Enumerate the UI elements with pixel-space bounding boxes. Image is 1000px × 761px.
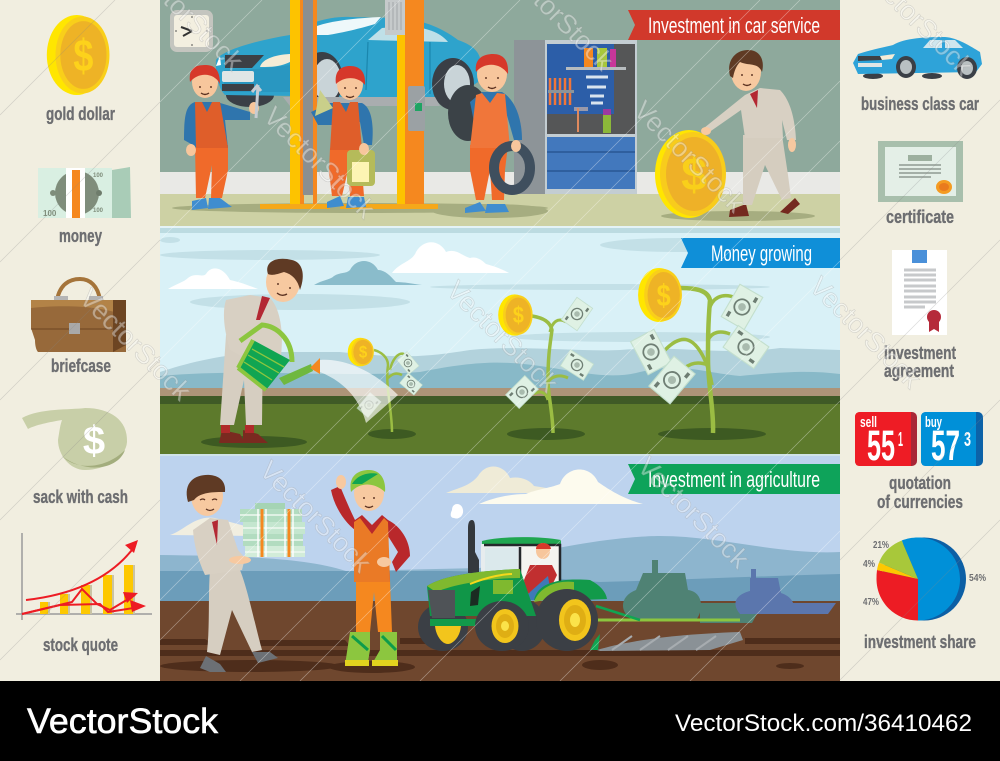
label: quotation of currencies: [877, 473, 963, 512]
icon: investment agreement: [892, 250, 947, 335]
driver: [524, 565, 557, 600]
icon: gold dollar: [47, 15, 110, 95]
panel: right sidebar: [853, 37, 986, 652]
clouds: [170, 466, 643, 536]
icon: sack with cash: $: [83, 419, 105, 463]
watermark text: VectorStock: [804, 271, 927, 394]
giant gold coin: [655, 130, 726, 218]
money tree: medium: [498, 294, 594, 433]
front wheel: [475, 601, 529, 651]
lift arm: [283, 97, 440, 106]
label: certificate: certificate: [886, 207, 954, 227]
plow: [590, 606, 743, 651]
label: quotation of currencies: of currencies: [877, 492, 963, 512]
watermark text: VectorStock: [258, 101, 381, 224]
silhouette tractor: green: [623, 560, 763, 623]
mountains: [160, 536, 840, 605]
tractor: [418, 504, 743, 651]
silhouette tractor: blue: [735, 569, 836, 614]
chart: stock quote: [16, 533, 152, 620]
label: stock quote: stock quote: [43, 635, 118, 655]
watermark text: VectorStock: [632, 451, 755, 574]
chart: investment share pie: 4%: [863, 559, 875, 570]
businessman pushing coin: [701, 50, 800, 217]
businessman watering: [219, 259, 398, 443]
icon: quotation board sell: sell: [860, 414, 877, 431]
hood: [427, 569, 536, 616]
banner: money growing: Money growing: [711, 241, 812, 266]
watermark text: [74, 0, 979, 578]
label: briefcase: briefcase: [51, 356, 111, 376]
chart: investment share pie: 47%: [863, 597, 879, 608]
footer logo text: VectorStock: [27, 702, 219, 741]
car on lift: [216, 17, 480, 110]
footer image id: VectorStock.com/36410462: [675, 710, 972, 737]
rear wheel: [536, 589, 598, 651]
icon: business class car: [853, 37, 982, 79]
plant shadows: [201, 428, 766, 448]
mechanic: right: [465, 54, 530, 213]
mountains: [160, 348, 840, 390]
giant gold coin: $: [681, 148, 707, 200]
watermark text: VectorStock: [74, 283, 197, 406]
cab: [481, 544, 561, 585]
label: gold dollar: gold dollar: [46, 104, 115, 124]
icon: money: 100: [43, 209, 57, 218]
watermark diagonal lines: [160, 0, 840, 681]
mechanic: centre: [311, 66, 375, 208]
banner: investment in agriculture: [628, 464, 840, 494]
icon: briefcase: [31, 279, 126, 352]
watering can: [238, 325, 320, 390]
watermark text: VectorStock: [254, 455, 377, 578]
panel: investment in car service: [160, 0, 840, 228]
icon: sack with cash: [22, 408, 127, 470]
watermark text: VectorStock: [628, 95, 751, 218]
icon: money: 100: [93, 208, 104, 214]
banner: investment in agriculture: Investment in agriculture: [648, 467, 820, 492]
label: quotation of currencies: quotation: [889, 473, 951, 493]
money stack: [240, 503, 305, 557]
icon: quotation board sell: 55: [867, 422, 895, 470]
icon: certificate: [878, 141, 963, 202]
banner: money growing: [681, 238, 840, 268]
exhaust: [468, 520, 479, 573]
icon: quotation board buy: buy: [925, 414, 942, 431]
floor shadows: [172, 203, 815, 221]
label: sack with cash: sack with cash: [33, 487, 128, 507]
tire behind mechanic: [448, 85, 488, 141]
label: investment agreement: agreement: [884, 361, 954, 381]
mechanic: left: [184, 65, 261, 210]
rear fender: [534, 580, 607, 600]
car lift posts: [260, 0, 438, 209]
icon: quotation board buy: 3: [964, 429, 971, 451]
icon: quotation board buy: [921, 412, 983, 470]
soil: [160, 601, 840, 681]
icon: wall clock: [170, 10, 213, 52]
label: money: money: [59, 226, 102, 246]
farmer: [331, 470, 410, 666]
money tree: small: [348, 338, 422, 432]
banner: investment in car service: Investment in car service: [648, 13, 820, 38]
oil canister: [347, 150, 375, 186]
icon: quotation board buy: 57: [931, 422, 960, 470]
icon: quotation board sell: 1: [898, 429, 903, 451]
watermark text: VectorStock: [441, 275, 564, 398]
icon: money: 100: [93, 173, 104, 179]
money tree: large: [631, 268, 769, 433]
icon: quotation board sell: [855, 412, 917, 470]
sky bands: [160, 237, 770, 342]
wheels: [301, 52, 343, 108]
label: investment agreement: [884, 343, 956, 381]
businessman with money: [187, 475, 305, 672]
label: investment agreement: investment: [884, 343, 956, 363]
icon: money: [38, 167, 131, 218]
footer bar: [0, 681, 1000, 761]
tool cabinet: [514, 40, 637, 194]
clouds: [168, 242, 509, 289]
water stream: [320, 360, 398, 423]
baseboard: [160, 172, 840, 195]
chart: investment share pie: 54%: [969, 573, 986, 584]
panel: investment in agriculture: [160, 456, 840, 681]
panel: money growing: [160, 228, 840, 456]
chart: investment share pie: 21%: [873, 540, 889, 551]
panel: left sidebar: [16, 15, 152, 655]
banner: investment in car service: [628, 10, 840, 40]
chart: investment share pie: [863, 538, 986, 620]
